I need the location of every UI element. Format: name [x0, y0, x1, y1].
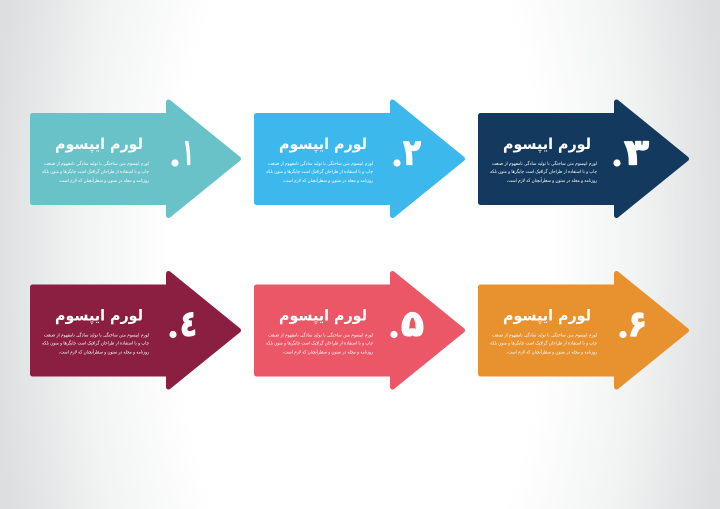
body text 4: لورم ایپسوم متن ساختگی با تولید سادگی نامفهوم از صنعت: [44, 332, 149, 338]
heading 2: لورم ایپسوم: [279, 135, 367, 154]
body text 2: [266, 160, 374, 184]
body text 1: چاپ و با استفاده از طراحان گرافیک است چاپگرها و متون بلکه: [42, 168, 149, 175]
arrow panel 6: [480, 274, 686, 387]
body text 5: [266, 332, 374, 356]
number 6: [619, 304, 647, 345]
body text 3: روزنامه و مجله در ستون و سطرآنچنان که لازم است،: [507, 177, 598, 184]
body text 3: چاپ و با استفاده از طراحان گرافیک است چاپگرها و متون بلکه: [490, 168, 597, 175]
arrow panel 1: [32, 102, 238, 216]
body text 1: لورم ایپسوم متن ساختگی با تولید سادگی نامفهوم از صنعت: [44, 160, 149, 167]
heading 1: لورم ایپسوم: [55, 135, 143, 154]
number 2: ۲: [403, 132, 421, 174]
body text 3: [490, 160, 598, 184]
body text 6: چاپ و با استفاده از طراحان گرافیک است چاپگرها و متون بلکه: [490, 340, 597, 346]
number 5: ۵: [401, 304, 424, 345]
heading 4: لورم ایپسوم: [55, 306, 143, 326]
number 1: [171, 132, 193, 174]
body text 4: روزنامه و مجله در ستون و سطرآنچنان که لازم است،: [59, 348, 150, 356]
body text 5: لورم ایپسوم متن ساختگی با تولید سادگی نامفهوم از صنعت: [268, 332, 373, 338]
number 4: ٤: [180, 304, 197, 345]
body text 6: روزنامه و مجله در ستون و سطرآنچنان که لازم است،: [507, 348, 598, 356]
arrow panel 1: ۱: [183, 132, 193, 174]
body text 1: روزنامه و مجله در ستون و سطرآنچنان که لازم است،: [59, 177, 150, 184]
body text 3: لورم ایپسوم متن ساختگی با تولید سادگی نامفهوم از صنعت: [492, 160, 597, 167]
heading 6: لورم ایپسوم: [503, 306, 591, 326]
arrow panel 5: [256, 274, 462, 387]
arrow panel 3: [480, 102, 686, 216]
body text 6: لورم ایپسوم متن ساختگی با تولید سادگی نامفهوم از صنعت: [492, 332, 597, 338]
body text 5: چاپ و با استفاده از طراحان گرافیک است چاپگرها و متون بلکه: [266, 340, 373, 346]
number 3: [613, 132, 649, 174]
body text 2: روزنامه و مجله در ستون و سطرآنچنان که لازم است،: [283, 177, 374, 184]
body text 2: لورم ایپسوم متن ساختگی با تولید سادگی نامفهوم از صنعت: [268, 160, 373, 167]
number 4: [169, 304, 197, 345]
body text 4: [42, 332, 150, 356]
heading 3: لورم ایپسوم: [503, 135, 591, 154]
number 2: [393, 132, 421, 174]
heading 5: لورم ایپسوم: [279, 306, 367, 326]
body text 6: [490, 332, 598, 356]
arrow panel 4: [32, 274, 238, 387]
number 5: [390, 304, 424, 345]
body text 2: چاپ و با استفاده از طراحان گرافیک است چاپگرها و متون بلکه: [266, 168, 373, 175]
number 6: ۶: [628, 304, 647, 345]
arrow panel 2: [256, 102, 462, 216]
body text 4: چاپ و با استفاده از طراحان گرافیک است چاپگرها و متون بلکه: [42, 340, 149, 346]
number 3: ۳: [624, 132, 649, 174]
body text 1: [42, 160, 150, 184]
body text 5: روزنامه و مجله در ستون و سطرآنچنان که لازم است،: [283, 348, 374, 356]
